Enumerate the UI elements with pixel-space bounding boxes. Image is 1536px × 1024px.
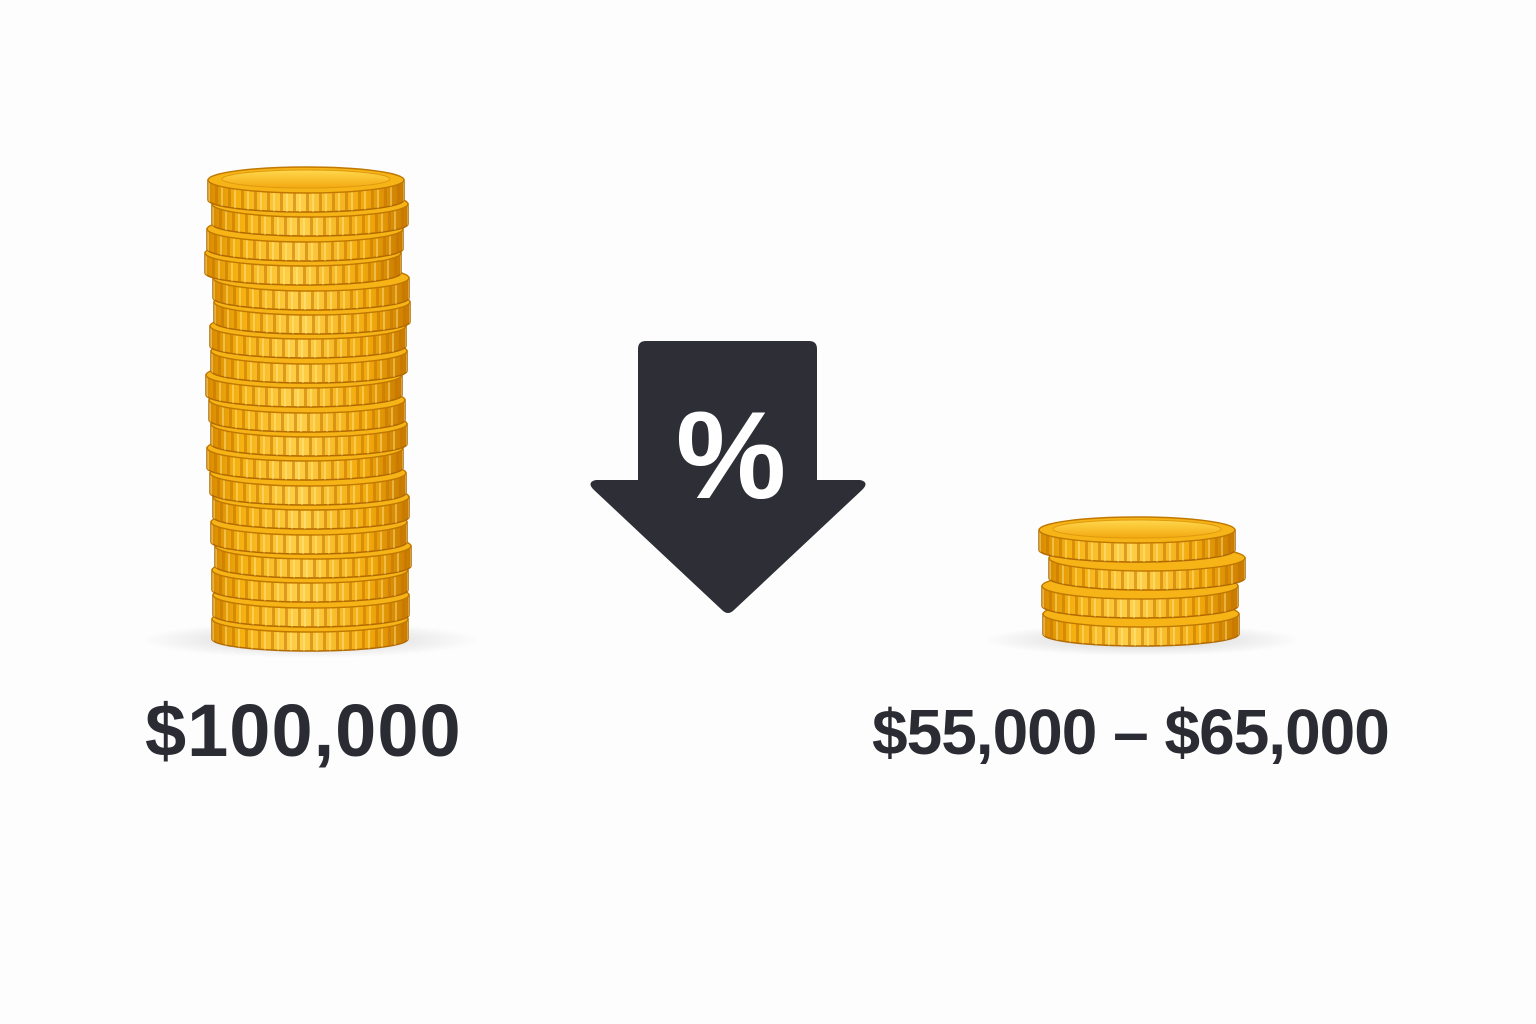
coin stack: small	[1039, 517, 1245, 646]
label: reduced range: $55,000 – $65,000	[872, 696, 1389, 768]
shadow left	[140, 622, 480, 658]
coin stack: tall	[205, 167, 411, 651]
percent sign: %	[676, 387, 786, 525]
label: original amount: $100,000	[145, 689, 462, 772]
shadow right	[982, 624, 1302, 656]
arrow: percent down	[590, 341, 866, 613]
